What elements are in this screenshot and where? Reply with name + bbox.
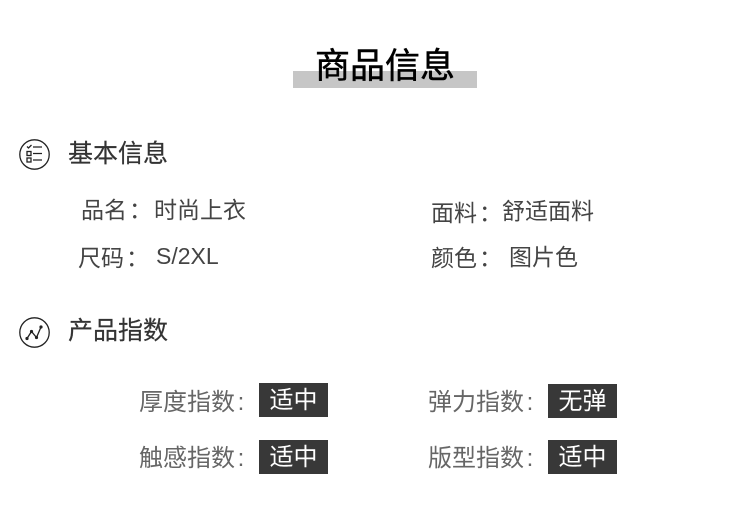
- text: colour value: 图片色: [509, 244, 578, 270]
- text: product name value: 时尚上衣: [154, 197, 246, 223]
- tag: fit value: 适中: [558, 444, 606, 471]
- tag: thickness value: 适中: [270, 387, 318, 414]
- text: colour label: 颜色：: [431, 245, 502, 271]
- icon: line chart: [19, 317, 50, 348]
- heading: product indices: 产品指数: [68, 317, 168, 345]
- heading: basic info: 基本信息: [68, 140, 168, 168]
- label: feel: 触感指数 :: [139, 445, 244, 472]
- tag: feel value: 适中: [270, 444, 318, 471]
- text: product name label: 品名：: [81, 197, 152, 223]
- label: elasticity: 弹力指数 :: [428, 389, 533, 416]
- text: fabric label: 面料：: [431, 200, 502, 226]
- tag: elasticity value: [548, 384, 617, 418]
- text: fabric value: 舒适面料: [502, 198, 594, 224]
- label: thickness: 厚度指数 :: [139, 389, 244, 416]
- title: 商品信息: [315, 47, 455, 86]
- tag: fit value: [548, 440, 617, 474]
- text: size label: 尺码：: [78, 245, 149, 271]
- title band: [293, 71, 477, 88]
- text: size value: S/2XL: [156, 243, 219, 269]
- tag: thickness value: [259, 383, 328, 417]
- tag: elasticity value: 无弹: [558, 388, 606, 415]
- icon: checklist: [19, 139, 50, 170]
- tag: feel value: [259, 440, 328, 474]
- label: fit: 版型指数 :: [428, 445, 533, 472]
